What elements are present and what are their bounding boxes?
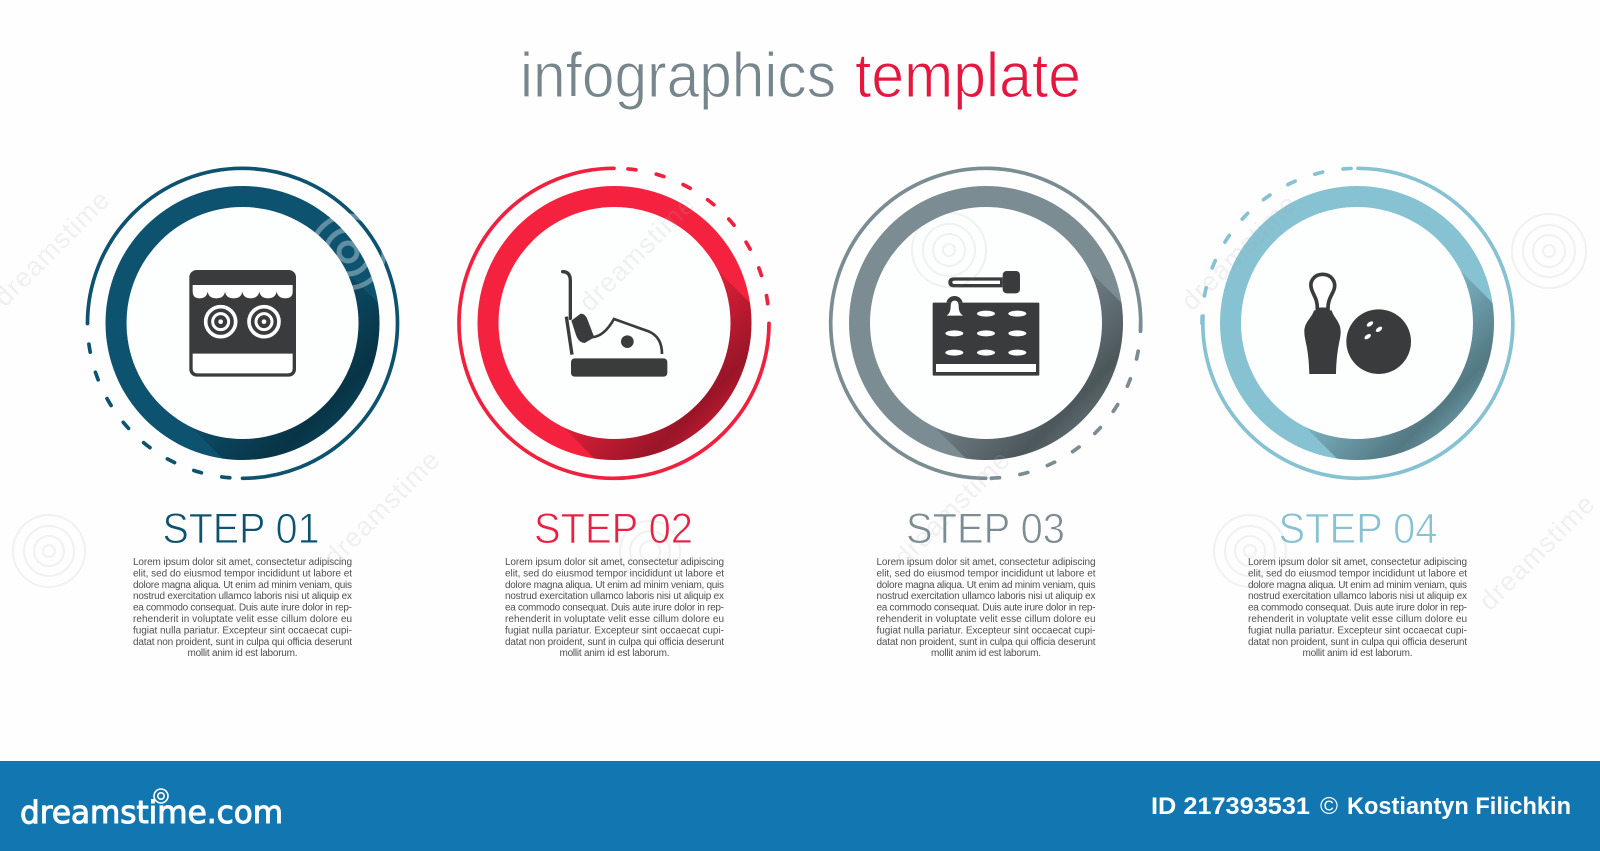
icon: shooting gallery booth [189,270,296,377]
watermark text: dreamstime [1473,488,1600,616]
step 01 body text: fugiat nulla pariatur. Excepteur sint occaecat cupi- [133,625,352,636]
panel: step 03 [828,166,1143,656]
step 02 body text: ea commodo consequat. Duis aute irure dolor in rep- [505,603,724,614]
footer bar [0,761,1600,851]
ring: step 02 outer arcs [459,168,769,478]
image id and author credit: © [1320,793,1338,820]
ring: step 03 outer arcs [831,168,1141,478]
step 02 heading: STEP 02 [534,506,693,553]
step 01 body text: Lorem ipsum dolor sit amet, consectetur adipiscing [133,557,352,568]
title [520,41,1081,111]
icon: bowling pin and ball [1304,274,1411,374]
step 01 body text: dolore magna aliqua. Ut enim ad minim veniam, quis [133,580,352,591]
step 02 body text: datat non proident, sunt in culpa qui officia deserunt [505,637,724,648]
image id and author credit [1151,793,1571,820]
step 03 body text: fugiat nulla pariatur. Excepteur sint occaecat cupi- [876,625,1096,636]
ring: step 01 outer arcs [88,168,398,478]
step 03 body text: datat non proident, sunt in culpa qui officia deserunt [876,637,1096,648]
ring: step 04 outer arcs [1202,168,1513,478]
step 01 heading: STEP 01 [162,506,320,553]
step 01 body text: datat non proident, sunt in culpa qui officia deserunt [133,637,352,648]
step 01 body text [133,557,352,659]
image id and author credit: ID 217393531 [1151,793,1310,820]
ring: step 04 thick ring with long shadow [1220,186,1494,460]
step 04 body text: datat non proident, sunt in culpa qui officia deserunt [1248,637,1467,648]
step 01 body text: elit, sed do eiusmod tempor incididunt ut labore et [133,568,352,579]
watermark text: dreamstime [318,444,446,572]
step 02 body text: Lorem ipsum dolor sit amet, consectetur adipiscing [505,557,724,568]
watermark text: dreamstime [573,189,701,317]
watermark text: dreamstime [888,444,1016,572]
step 02 body text: elit, sed do eiusmod tempor incididunt ut labore et [505,568,724,579]
step 02 body text [505,557,724,659]
step 03 body text: ea commodo consequat. Duis aute irure dolor in rep- [876,603,1096,614]
logo: dreamstime.com: dreamstime.com [20,795,283,831]
step 04 body text: dolore magna aliqua. Ut enim ad minim veniam, quis [1248,580,1467,591]
step 02 body text: mollit anim id est laborum. [560,648,670,659]
step 02 body text: nostrud exercitation ullamco laboris nisi ut aliquip ex [505,591,724,602]
watermark text [0,184,1600,616]
step 03 body text: dolore magna aliqua. Ut enim ad minim veniam, quis [876,580,1096,591]
step 01 body text: mollit anim id est laborum. [188,648,298,659]
step 01 body text: ea commodo consequat. Duis aute irure dolor in rep- [133,603,352,614]
step 04 body text: fugiat nulla pariatur. Excepteur sint occaecat cupi- [1248,625,1467,636]
step 02 body text: dolore magna aliqua. Ut enim ad minim veniam, quis [505,580,724,591]
ring: step 03 thick ring with long shadow [849,186,1123,460]
panel: step 01 [86,166,400,656]
step 03 body text: mollit anim id est laborum. [931,648,1041,659]
ring: step 02 thick ring with long shadow [478,186,752,460]
watermark text: dreamstime [1175,188,1303,316]
step 03 body text: Lorem ipsum dolor sit amet, consectetur adipiscing [876,557,1096,568]
icon: high striker game [933,271,1039,376]
step 03 body text: elit, sed do eiusmod tempor incididunt ut labore et [876,568,1096,579]
step 04 body text [1248,557,1467,659]
step 04 body text: ea commodo consequat. Duis aute irure dolor in rep- [1248,603,1467,614]
step 04 body text: elit, sed do eiusmod tempor incididunt ut labore et [1248,568,1467,579]
title: template [855,41,1081,111]
step 03 body text [876,557,1096,659]
step 03 body text: rehenderit in voluptate velit esse cillum dolore eu [876,614,1096,625]
step 03 heading: STEP 03 [906,506,1065,553]
step 04 heading: STEP 04 [1278,506,1438,553]
icon: bumper car [563,272,667,377]
image id and author credit: Kostiantyn Filichkin [1347,793,1571,820]
watermark spirals [13,213,1586,587]
step 02 body text: rehenderit in voluptate velit esse cillum dolore eu [505,614,724,625]
step 01 body text: nostrud exercitation ullamco laboris nisi ut aliquip ex [133,591,352,602]
title: infographics [520,41,836,111]
step 01 body text: rehenderit in voluptate velit esse cillum dolore eu [133,614,352,625]
step 04 body text: nostrud exercitation ullamco laboris nisi ut aliquip ex [1248,591,1467,602]
panel: step 02 [457,166,771,656]
panel: step 04 [1200,166,1515,656]
step 04 body text: mollit anim id est laborum. [1302,648,1412,659]
step 04 body text: Lorem ipsum dolor sit amet, consectetur adipiscing [1248,557,1467,568]
ring: step 01 thick ring with long shadow [106,186,380,460]
step 02 body text: fugiat nulla pariatur. Excepteur sint occaecat cupi- [505,625,724,636]
step 03 body text: nostrud exercitation ullamco laboris nisi ut aliquip ex [876,591,1096,602]
step 04 body text: rehenderit in voluptate velit esse cillum dolore eu [1248,614,1467,625]
